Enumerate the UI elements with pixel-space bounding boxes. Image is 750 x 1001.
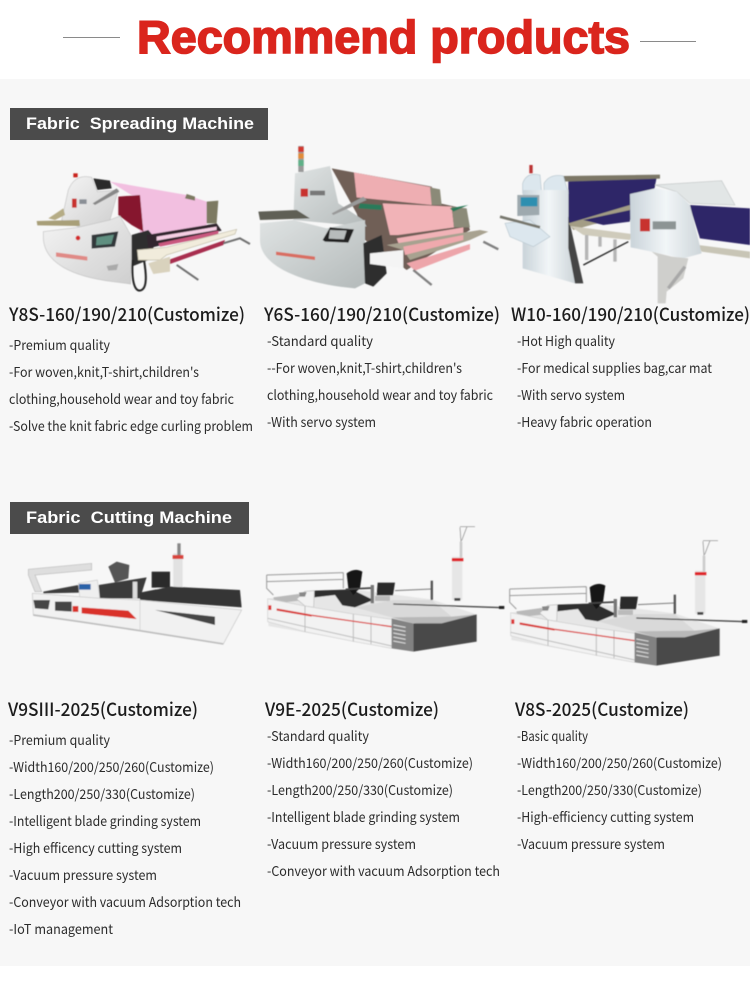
product 4 label: V9SIII: -High efficency cutting system — [9, 837, 182, 857]
product 6 label: V8S: -Length200/250/330(Customize) — [517, 779, 702, 799]
product 1 label: Y8S — [8, 301, 253, 435]
product 5 label: V9E: -Length200/250/330(Customize) — [267, 779, 453, 799]
product 1 label: Y8S: -For woven,knit,T-shirt,children's — [9, 361, 199, 381]
product 4 label: V9SIII: -IoT management — [9, 918, 113, 938]
product image: Y6S spreading machine — [258, 146, 498, 288]
product 1 label: Y8S: -Solve the knit fabric edge curling problem — [9, 415, 253, 435]
product 6 label: V8S: V8S-2025(Customize) — [514, 696, 689, 722]
product 4 label: V9SIII — [7, 696, 241, 938]
product 6 label: V8S: -High-efficiency cutting system — [517, 806, 694, 826]
product 5 label: V9E: -Width160/200/250/260(Customize) — [267, 752, 473, 772]
product 2 label: Y6S: --For woven,knit,T-shirt,children's — [267, 357, 462, 377]
product 5 label: V9E — [264, 696, 500, 880]
product 6 label: V8S — [514, 696, 722, 853]
product 2 label: Y6S: clothing,household wear and toy fabric — [267, 384, 493, 404]
product 3 label: W10: -With servo system — [517, 384, 625, 404]
product image: V9SIII cutting machine — [28, 543, 242, 644]
product 4 label: V9SIII: -Premium quality — [9, 729, 110, 749]
section badge: Fabric Spreading Machine — [10, 108, 268, 140]
product 4 label: V9SIII: V9SIII-2025(Customize) — [7, 696, 198, 722]
product image: Y8S spreading machine — [37, 173, 250, 291]
product 5 label: V9E: V9E-2025(Customize) — [264, 696, 439, 722]
product 6 label: V8S: -Vacuum pressure system — [517, 833, 665, 853]
product 6 label: V8S: -Width160/200/250/260(Customize) — [517, 752, 722, 772]
product 4 label: V9SIII: -Width160/200/250/260(Customize) — [9, 756, 214, 776]
section badge: Fabric Cutting Machine: Fabric Cutting Machine — [26, 509, 232, 527]
product 5 label: V9E: -Conveyor with vacuum Adsorption tech — [267, 860, 500, 880]
product image: V8S cutting machine — [510, 541, 747, 666]
product image: W10 spreading machine — [500, 165, 750, 303]
product image: V9E cutting machine — [267, 527, 504, 652]
product 2 label: Y6S: Y6S-160/190/210(Customize) — [263, 301, 500, 327]
title: Recommend products — [137, 11, 630, 63]
product 5 label: V9E: -Standard quality — [267, 725, 369, 745]
product 2 label: Y6S: -Standard quality — [267, 330, 373, 350]
product 2 label: Y6S — [263, 301, 500, 431]
product 3 label: W10 — [511, 301, 750, 431]
product 3 label: W10: -Heavy fabric operation — [517, 411, 652, 431]
product 4 label: V9SIII: -Conveyor with vacuum Adsorption tech — [9, 891, 241, 911]
product 5 label: V9E: -Intelligent blade grinding system — [267, 806, 460, 826]
section badge: Fabric Cutting Machine — [10, 502, 249, 534]
product 1 label: Y8S: clothing,household wear and toy fabric — [9, 388, 234, 408]
product 3 label: W10: -For medical supplies bag,car mat — [517, 357, 712, 377]
product 4 label: V9SIII: -Vacuum pressure system — [9, 864, 157, 884]
product 3 label: W10: -Hot High quality — [517, 330, 615, 350]
product 4 label: V9SIII: -Intelligent blade grinding system — [9, 810, 201, 830]
product 2 label: Y6S: -With servo system — [267, 411, 376, 431]
product 5 label: V9E: -Vacuum pressure system — [267, 833, 416, 853]
section badge: Fabric Spreading Machine: Fabric Spreading Machine — [26, 115, 254, 133]
product 1 label: Y8S: Y8S-160/190/210(Customize) — [8, 301, 245, 327]
product 1 label: Y8S: -Premium quality — [9, 334, 110, 354]
product 6 label: V8S: -Basic quality — [517, 725, 588, 745]
product 4 label: V9SIII: -Length200/250/330(Customize) — [9, 783, 195, 803]
